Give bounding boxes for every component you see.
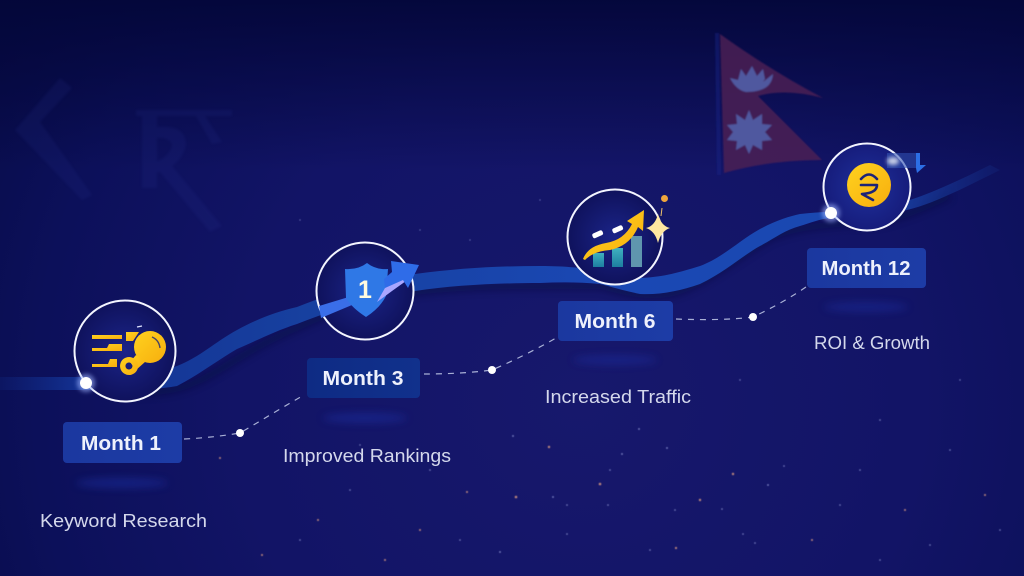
circle <box>824 144 910 230</box>
circle <box>568 190 662 284</box>
badge glow <box>573 355 657 365</box>
label: Improved Rankings <box>283 446 451 466</box>
label: Keyword Research <box>40 511 207 531</box>
badge <box>558 301 673 341</box>
icon: growth chart <box>583 195 670 267</box>
panel: Month 12 <box>807 144 930 353</box>
connector dot <box>488 366 496 374</box>
glowing node <box>822 204 840 222</box>
badge glow <box>76 478 168 488</box>
connector dashes <box>184 395 304 439</box>
label: Increased Traffic <box>545 387 691 407</box>
badge: Month 6 <box>574 311 656 333</box>
key spark <box>137 326 142 327</box>
badge: Month 12 <box>822 258 910 280</box>
star field <box>199 199 1001 561</box>
growth ribbon <box>0 165 1000 393</box>
circle <box>74 300 176 402</box>
key highlight <box>152 337 160 348</box>
connector dot <box>236 429 244 437</box>
Nepal flag <box>717 33 823 175</box>
badge: Month 3 <box>322 368 404 390</box>
start node <box>77 374 95 392</box>
icon: shield with rank: 1 <box>358 276 372 304</box>
flag emblem: moon <box>730 66 773 92</box>
badge <box>807 248 926 288</box>
connector dashes <box>424 338 556 374</box>
badge glow <box>824 302 908 312</box>
icon: shield with rank <box>319 261 419 318</box>
circle <box>316 242 414 340</box>
panel: Month 1 <box>40 300 304 531</box>
watermark: rupee glyphs <box>15 78 232 232</box>
label: ROI & Growth <box>814 333 930 353</box>
badge glow <box>323 413 407 423</box>
icon: card and arrow <box>887 153 926 173</box>
badge <box>63 422 182 463</box>
panel: Month 6 <box>545 190 806 407</box>
panel: Month 3 <box>283 242 556 466</box>
flag emblem: sun <box>727 110 772 154</box>
icon: speeding key <box>92 331 166 375</box>
badge <box>307 358 420 398</box>
badge: Month 1 <box>81 433 161 455</box>
connector dot <box>749 313 757 321</box>
icon: rupee coin <box>847 163 891 207</box>
connector dashes <box>676 287 806 320</box>
